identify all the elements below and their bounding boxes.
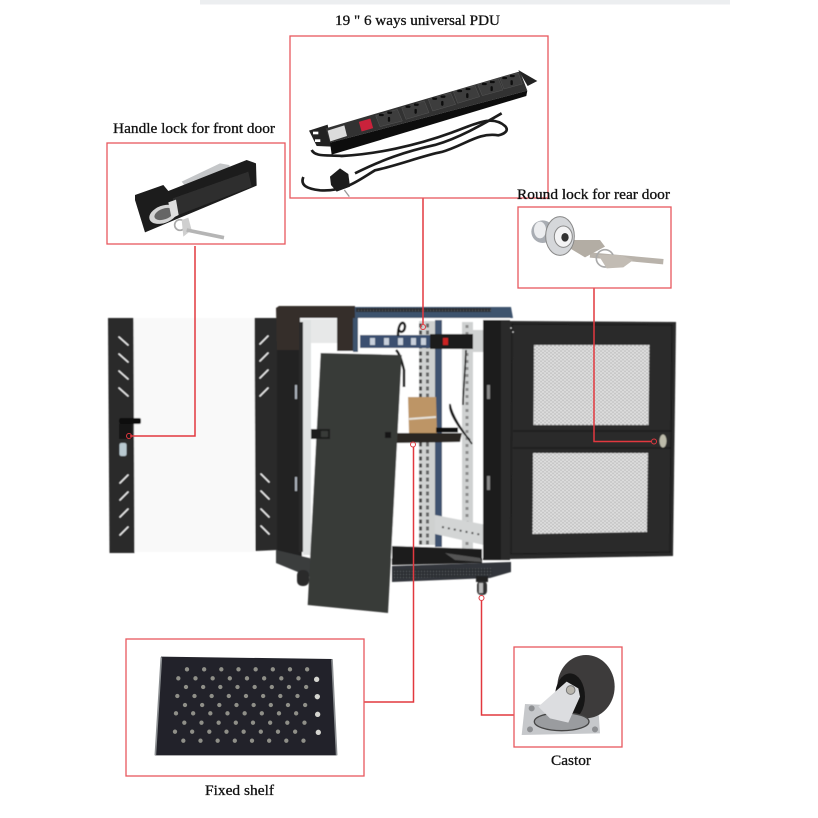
round lock heading: Round lock for rear door <box>517 187 670 203</box>
connector: castor <box>479 596 514 715</box>
castor frame <box>514 647 622 747</box>
panel: round lock <box>517 187 671 288</box>
icon: castor wheel <box>522 655 615 735</box>
PDU heading: 19 " 6 ways universal PDU <box>335 13 501 29</box>
icon: handle lock <box>135 160 257 238</box>
panel: PDU <box>290 13 548 198</box>
connector: handle lock <box>126 246 195 438</box>
panel: castor <box>514 647 622 769</box>
icon: round lock <box>531 217 663 268</box>
connector: fixed shelf <box>364 442 416 702</box>
rack power strip <box>360 323 473 387</box>
handle lock frame <box>107 143 285 244</box>
cabinet frame <box>276 306 513 582</box>
rear door <box>508 321 676 559</box>
PDU frame <box>290 36 548 198</box>
panel: handle lock <box>107 121 285 244</box>
glass front door <box>108 318 278 553</box>
castor label: Castor <box>551 753 591 769</box>
connector: round lock <box>594 288 656 444</box>
icon: perforated shelf <box>155 657 337 755</box>
panel: fixed shelf <box>126 639 364 799</box>
handle lock heading: Handle lock for front door <box>113 121 275 137</box>
shelf frame <box>126 639 364 776</box>
removed side panel <box>308 353 402 613</box>
connector: PDU <box>420 198 426 330</box>
top browser strip <box>200 0 730 4</box>
main cabinet photo <box>108 306 676 613</box>
shelf with box and cable <box>397 350 472 444</box>
round lock frame <box>518 207 671 288</box>
shelf label: Fixed shelf <box>205 783 274 799</box>
icon: power strip <box>302 70 537 197</box>
castor on cabinet <box>297 570 488 595</box>
